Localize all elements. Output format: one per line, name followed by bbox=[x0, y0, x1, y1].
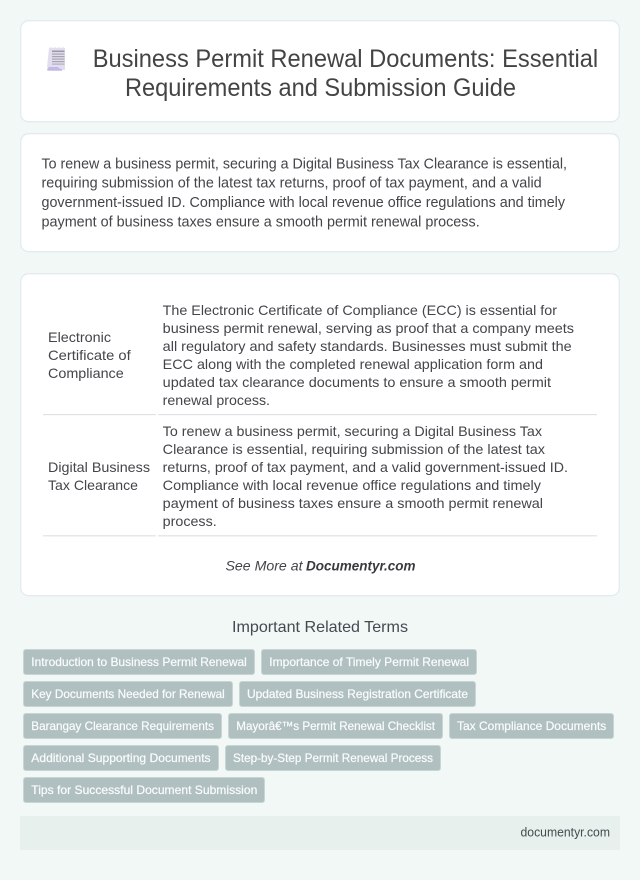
tag: Barangay Clearance Requirements bbox=[31, 719, 214, 733]
row description: returns, proof of tax payment, and a valid government-issued ID. bbox=[163, 459, 568, 475]
row description: updated tax clearance documents to ensure a smooth permit bbox=[163, 374, 551, 390]
row description: Clearance is essential, requiring submission of the latest tax bbox=[163, 441, 545, 457]
row label: Electronic bbox=[48, 329, 111, 345]
row description: To renew a business permit, securing a Digital Business Tax bbox=[163, 423, 542, 439]
row description: The Electronic Certificate of Compliance (ECC) is essential for bbox=[163, 302, 557, 318]
row description bbox=[163, 302, 574, 408]
panel: introduction bbox=[21, 134, 619, 252]
row description: ECC along with the completed renewal application form and bbox=[163, 356, 543, 372]
intro text bbox=[42, 156, 567, 230]
heading bbox=[93, 45, 598, 102]
tag bbox=[24, 714, 222, 738]
tag bbox=[24, 778, 264, 802]
panel: title bbox=[21, 21, 619, 122]
intro text: To renew a business permit, securing a Digital Business Tax Clearance is essential, bbox=[42, 156, 567, 172]
row: Digital Business Tax Clearance bbox=[48, 423, 568, 529]
row description: renewal process. bbox=[163, 392, 270, 408]
row description: process. bbox=[163, 513, 217, 529]
footer bbox=[20, 816, 620, 850]
see more link: Documentyr.com bbox=[306, 558, 416, 574]
tag: Introduction to Business Permit Renewal bbox=[31, 655, 247, 669]
see more link bbox=[226, 558, 416, 574]
row label: Certificate of bbox=[48, 347, 131, 363]
tags: related terms bbox=[24, 650, 614, 802]
tag: Tax Compliance Documents bbox=[457, 719, 606, 733]
tag: Additional Supporting Documents bbox=[31, 751, 211, 765]
tag bbox=[24, 650, 254, 674]
tag bbox=[24, 682, 232, 706]
tag bbox=[228, 714, 442, 738]
intro text: payment of business taxes ensure a smooth permit renewal process. bbox=[42, 214, 480, 230]
row description: business permit renewal, serving as proof that a company meets bbox=[163, 320, 574, 336]
row label: Compliance bbox=[48, 365, 124, 381]
heading: related terms: Important Related Terms bbox=[232, 619, 408, 636]
row description: payment of business taxes ensure a smooth permit renewal bbox=[163, 495, 543, 511]
row label: Tax Clearance bbox=[48, 477, 138, 493]
row description: all regulatory and safety standards. Businesses must submit the bbox=[163, 338, 572, 354]
row description bbox=[163, 423, 568, 529]
row label bbox=[48, 329, 131, 381]
tag bbox=[262, 650, 476, 674]
intro text: government-issued ID. Compliance with local revenue office regulations and timely bbox=[42, 195, 566, 211]
footer: documentyr.com bbox=[520, 826, 610, 840]
heading: Requirements and Submission Guide bbox=[125, 74, 516, 102]
tag: Updated Business Registration Certificate bbox=[247, 687, 468, 701]
tag: Key Documents Needed for Renewal bbox=[31, 687, 225, 701]
panel: document table bbox=[21, 274, 619, 596]
tag: Importance of Timely Permit Renewal bbox=[269, 655, 469, 669]
row description: Compliance with local revenue office regulations and timely bbox=[163, 477, 541, 493]
row label bbox=[48, 459, 150, 493]
row: Electronic Certificate of Compliance bbox=[48, 302, 574, 408]
tag: Step-by-Step Permit Renewal Process bbox=[233, 751, 433, 765]
tag bbox=[240, 682, 476, 706]
heading: Business Permit Renewal Documents: Essential bbox=[93, 45, 598, 73]
tag: Tips for Successful Document Submission bbox=[31, 783, 257, 797]
see more link: See More at bbox=[226, 558, 304, 574]
row label: Digital Business bbox=[48, 459, 150, 475]
tag bbox=[450, 714, 614, 738]
tag bbox=[24, 746, 218, 770]
icon: document bbox=[47, 47, 65, 71]
tag bbox=[226, 746, 440, 770]
tag: Mayorâ€™s Permit Renewal Checklist bbox=[236, 719, 436, 733]
intro text: requiring submission of the latest tax returns, proof of tax payment, and a valid bbox=[42, 176, 542, 192]
